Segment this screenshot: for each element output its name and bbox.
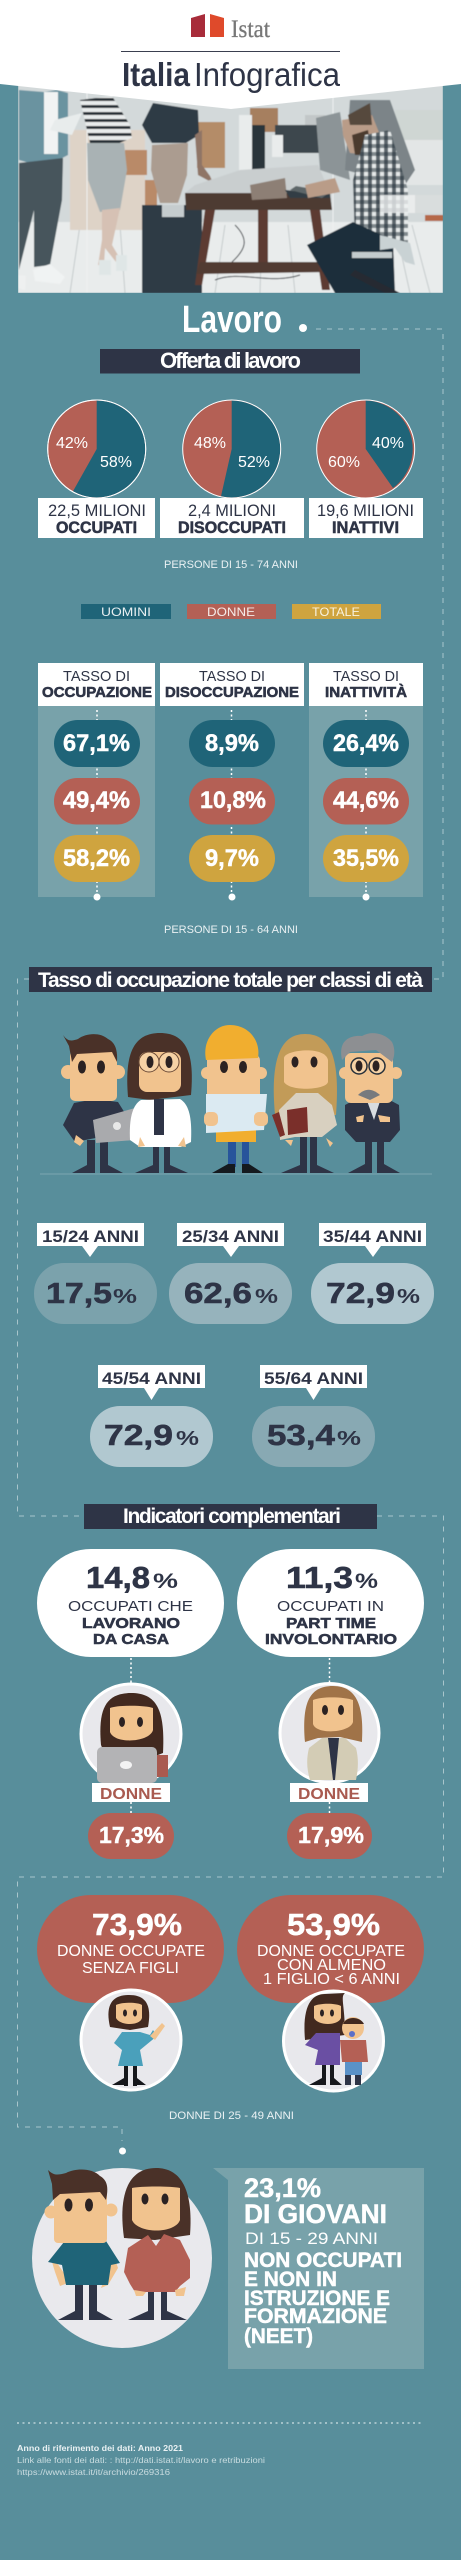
value: totale: 35,5% <box>333 845 399 872</box>
value pill: 35/44: 72,9 <box>326 1278 395 1310</box>
label: inattivi: 19,6 MILIONI <box>317 502 414 520</box>
illustration: young man and woman <box>32 2168 212 2348</box>
value pill: 55/64 <box>252 1406 375 1467</box>
value pill: 17,9: 17,9% <box>298 1822 364 1848</box>
label: occupati: OCCUPATI <box>56 519 137 537</box>
title: Lavoro: Lavoro <box>182 299 282 341</box>
label: occupati: 22,5 MILIONI <box>48 502 146 520</box>
card: donne con figlio: 1 FIGLIO < 6 ANNI <box>263 1971 400 1988</box>
age tag: 25/34 <box>177 1223 284 1257</box>
age tag: 25/34: 25/34 ANNI <box>182 1227 279 1246</box>
connector dot <box>119 2148 126 2154</box>
panel: tasso di disoccupazione <box>160 663 304 900</box>
legend <box>81 604 381 619</box>
legend: TOTALE <box>312 605 360 619</box>
value: donne: 49,4% <box>63 787 130 814</box>
value: donne <box>189 778 275 824</box>
pie chart: inattivi: 40% <box>372 435 404 452</box>
value pill: 55/64: % <box>337 1428 361 1450</box>
heading: indicatori complementari: Indicatori complementari <box>123 1505 341 1528</box>
label: donne <box>92 1783 170 1803</box>
panel: NEET: ISTRUZIONE E <box>244 2287 390 2310</box>
value: totale <box>54 835 140 882</box>
panel: NEET: DI 15 - 29 ANNI <box>245 2229 378 2248</box>
character: doctor <box>127 1033 192 1173</box>
value: uomini <box>54 720 140 767</box>
value pill: 15/24: % <box>113 1286 137 1308</box>
value pill: 25/34 <box>169 1263 292 1324</box>
card: part time involontario: OCCUPATI IN <box>277 1598 384 1615</box>
card: part time involontario: 11,3 <box>286 1560 353 1595</box>
photo: office team at work <box>18 85 443 293</box>
value: totale: 9,7% <box>205 845 259 872</box>
character: young man with laptop <box>61 1034 135 1173</box>
character: young woman <box>122 2168 191 2320</box>
pie chart: occupati: 58% <box>100 454 132 471</box>
card: part time involontario: PART TIME <box>286 1615 376 1632</box>
icon: woman with laptop <box>81 1684 181 1784</box>
value: totale <box>189 835 275 882</box>
card: part time involontario <box>237 1549 424 1657</box>
value pill: 25/34: 62,6 <box>184 1278 252 1310</box>
value pill: 45/54: % <box>176 1428 199 1450</box>
logo: Italia Infografica: Infografica <box>194 56 341 93</box>
logo: Istat: Istat <box>231 16 270 43</box>
value pill: 15/24 <box>34 1263 157 1324</box>
footer: data sources: Link alle fonti dei dati: : http://dati.istat.it/lavoro e retribuzioni <box>17 2455 265 2465</box>
pie chart: inattivi: 60% <box>328 454 360 471</box>
age tag: 45/54: 45/54 ANNI <box>102 1369 201 1388</box>
value: donne <box>54 778 140 824</box>
value pill: 15/24: 17,5 <box>46 1278 112 1310</box>
panel: tasso di occupazione <box>38 663 155 900</box>
value: uomini: 26,4% <box>333 730 399 757</box>
panel: disoccupati <box>160 400 304 538</box>
footer: data sources: https://www.istat.it/it/archivio/269316 <box>17 2467 170 2477</box>
value: donne <box>323 778 409 824</box>
value: donne: 44,6% <box>333 787 399 814</box>
heading: Offerta di lavoro <box>100 348 360 374</box>
panel: occupati <box>38 400 155 538</box>
card: donne senza figli: SENZA FIGLI <box>82 1960 179 1977</box>
value: totale <box>323 835 409 882</box>
age tag: 35/44: 35/44 ANNI <box>323 1227 422 1246</box>
panel: tasso di disoccupazione: DISOCCUPAZIONE <box>165 685 299 701</box>
value: uomini: 8,9% <box>205 730 259 757</box>
age tag: 15/24: 15/24 ANNI <box>42 1227 139 1246</box>
value: uomini: 67,1% <box>63 730 130 757</box>
pie chart: disoccupati: 52% <box>238 454 270 471</box>
heading: tasso di occupazione per classi di età: Tasso di occupazione totale per classi di età <box>38 969 423 992</box>
character: blonde woman <box>272 1034 337 1173</box>
label: disoccupati: 2,4 MILIONI <box>188 502 276 520</box>
connector dashed lines <box>18 329 444 2141</box>
label: occupati <box>38 498 155 538</box>
panel: NEET: E NON IN <box>244 2268 337 2291</box>
logo: Italia Infografica: Italia <box>122 56 191 93</box>
card: lavorano da casa: OCCUPATI CHE <box>68 1598 193 1615</box>
value pill: 35/44 <box>311 1263 434 1324</box>
icon: woman waving <box>81 1990 181 2090</box>
card: donne senza figli <box>37 1895 224 2003</box>
value pill: 25/34: % <box>255 1286 278 1308</box>
panel: NEET: DI GIOVANI <box>244 2199 387 2229</box>
pie chart: occupati: 42% <box>56 435 88 452</box>
illustration: five workers <box>40 1025 432 1174</box>
panel: NEET: FORMAZIONE <box>244 2305 387 2328</box>
card: lavorano da casa: 14,8 <box>86 1560 150 1595</box>
logo: Istat <box>191 14 270 43</box>
label: disoccupati: DISOCCUPATI <box>178 519 286 537</box>
card: donne con figlio: DONNE OCCUPATE <box>257 1943 405 1960</box>
value pill: 45/54: 72,9 <box>104 1420 173 1452</box>
value pill: 17,9 <box>287 1813 372 1859</box>
footer: data sources: Anno di riferimento dei dati: Anno 2021 <box>17 2443 183 2453</box>
heading: Offerta di lavoro: Offerta di lavoro <box>160 348 301 373</box>
value pill: 35/44: % <box>397 1286 420 1308</box>
character: older man in suit <box>339 1033 402 1173</box>
panel: tasso di inattività <box>309 663 423 900</box>
card: lavorano da casa <box>37 1549 224 1657</box>
card: lavorano da casa: % <box>153 1570 178 1593</box>
icon: mother and child <box>284 1991 384 2091</box>
value pill: 45/54 <box>90 1406 213 1467</box>
card: donne con figlio <box>237 1895 424 2003</box>
age tag: 15/24 <box>37 1223 144 1257</box>
value pill: 17,3 <box>88 1813 174 1859</box>
title dot <box>299 324 307 332</box>
card: part time involontario: % <box>355 1570 378 1593</box>
value: donne: 10,8% <box>200 787 266 814</box>
label: donne: DONNE <box>100 1786 162 1803</box>
legend: DONNE <box>207 605 255 619</box>
pie chart: disoccupati: 48% <box>194 435 226 452</box>
panel: NEET <box>213 2168 424 2369</box>
age tag: 35/44 <box>319 1223 426 1257</box>
label: inattivi <box>309 498 423 538</box>
legend: UOMINI <box>101 605 151 619</box>
label: inattivi: INATTIVI <box>332 519 399 537</box>
value pill: 55/64: 53,4 <box>267 1420 335 1452</box>
note: donne 25-49: DONNE DI 25 - 49 ANNI <box>169 2110 294 2122</box>
card: lavorano da casa: LAVORANO <box>82 1615 180 1632</box>
panel: tasso di disoccupazione: TASSO DI <box>199 669 265 685</box>
connector dotted lines <box>131 1658 330 1813</box>
pie chart: occupati <box>48 400 146 498</box>
value: uomini <box>189 720 275 767</box>
logo: Italia Infografica <box>121 51 341 93</box>
heading: indicatori complementari <box>84 1504 377 1529</box>
age tag: 45/54 <box>98 1365 205 1400</box>
label: disoccupati <box>160 498 304 538</box>
panel: tasso di occupazione: TASSO DI <box>63 669 130 685</box>
pie chart: disoccupati <box>183 400 281 498</box>
panel: NEET: 23,1% <box>244 2173 321 2203</box>
value: totale: 58,2% <box>63 845 130 872</box>
value: uomini <box>323 720 409 767</box>
panel: inattivi <box>309 400 423 538</box>
pie chart: inattivi <box>317 400 415 498</box>
character: construction worker <box>201 1025 268 1173</box>
card: lavorano da casa: DA CASA <box>93 1631 169 1648</box>
note: persone 15-74: PERSONE DI 15 - 74 ANNI <box>164 559 298 571</box>
character: young man <box>44 2170 120 2320</box>
card: donne con figlio: 53,9% <box>287 1907 380 1942</box>
panel: NEET: NON OCCUPATI <box>244 2249 402 2272</box>
age tag: 55/64 <box>260 1365 367 1400</box>
label: donne <box>290 1783 368 1803</box>
age tag: 55/64: 55/64 ANNI <box>264 1369 363 1388</box>
footer: data sources <box>17 2443 265 2477</box>
card: donne con figlio: CON ALMENO <box>277 1957 386 1974</box>
label: donne: DONNE <box>298 1786 360 1803</box>
panel: tasso di inattività: TASSO DI <box>333 669 399 685</box>
panel: tasso di inattività: INATTIVITÀ <box>325 684 408 701</box>
value pill: 17,3: 17,3% <box>99 1822 164 1848</box>
card: donne senza figli: DONNE OCCUPATE <box>57 1943 205 1960</box>
card: part time involontario: INVOLONTARIO <box>265 1631 397 1648</box>
icon: woman with jacket <box>280 1684 379 1782</box>
card: donne senza figli: 73,9% <box>92 1907 182 1942</box>
white header band <box>0 0 461 109</box>
panel: NEET: (NEET) <box>244 2325 313 2348</box>
panel: tasso di occupazione: OCCUPAZIONE <box>42 685 152 701</box>
note: persone 15-64: PERSONE DI 15 - 64 ANNI <box>164 924 298 936</box>
